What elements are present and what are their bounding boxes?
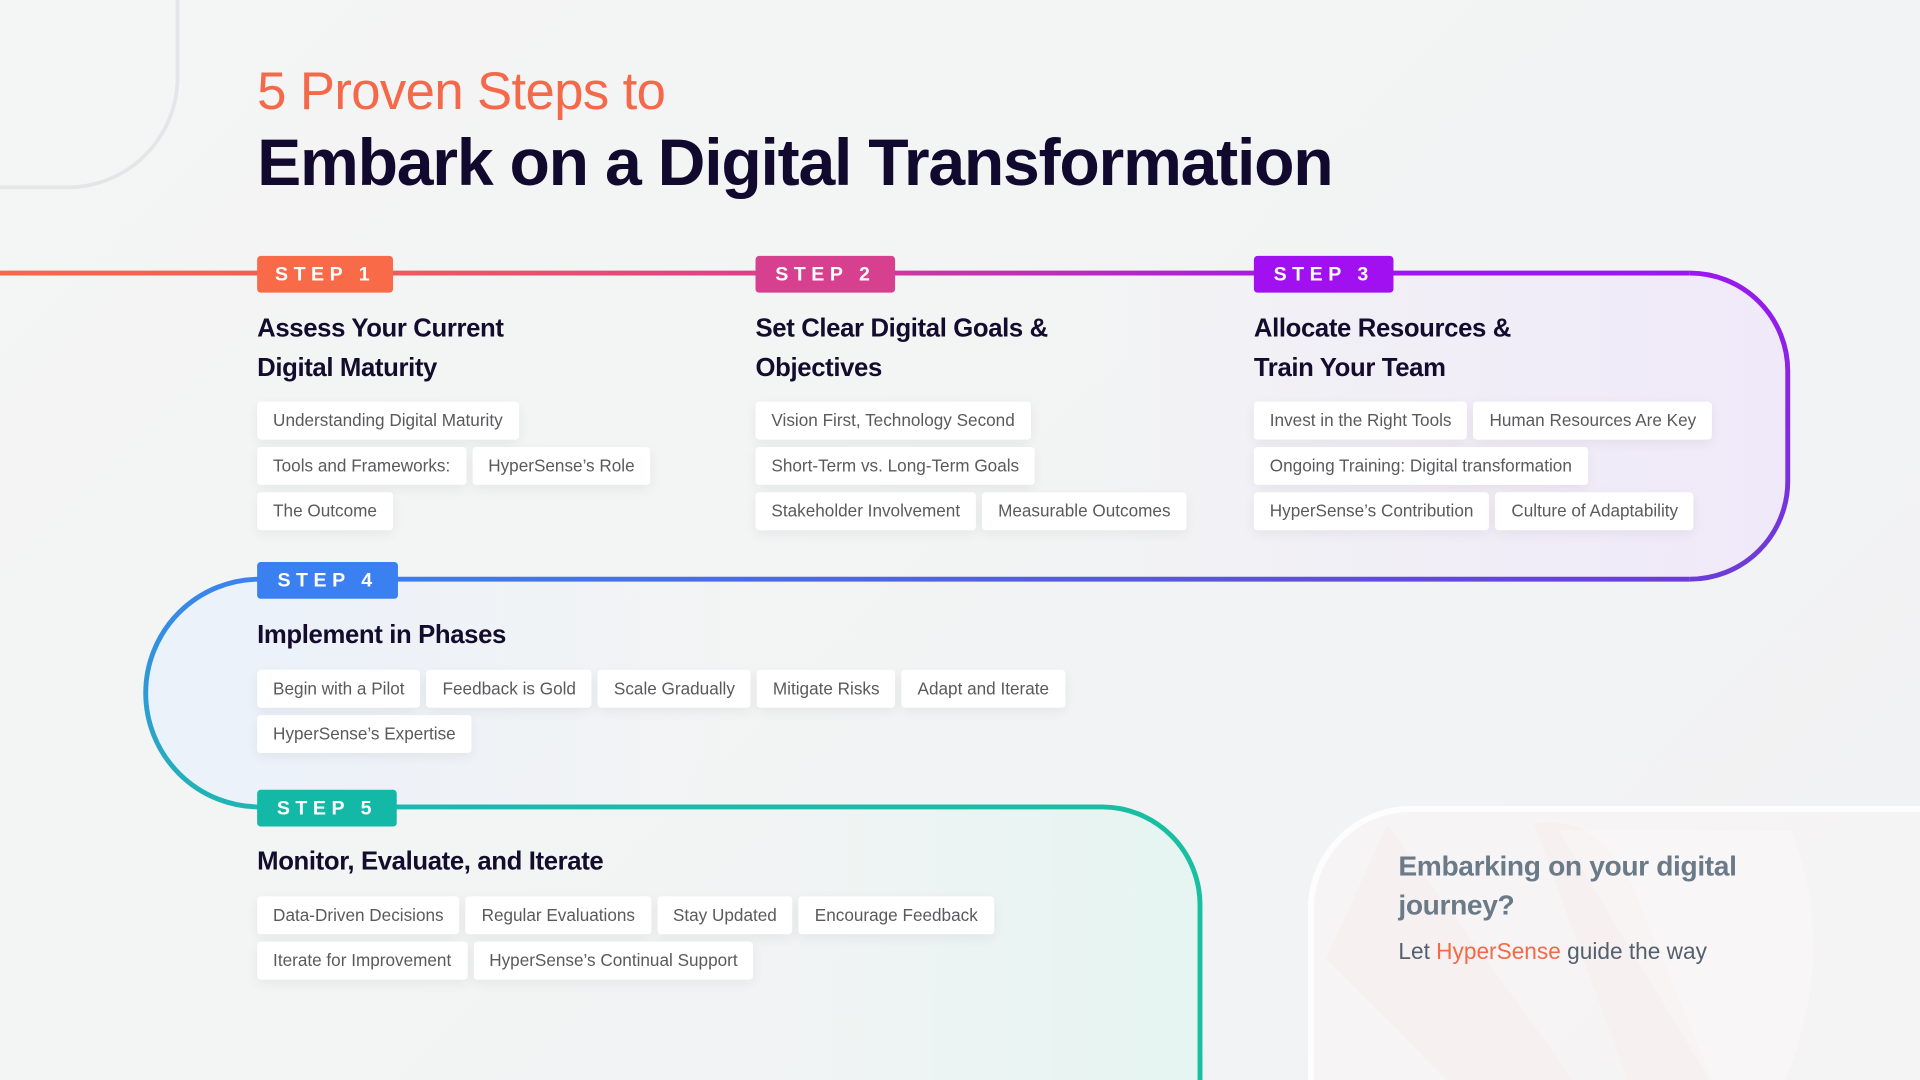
step 2: STEP 2 — [775, 264, 875, 285]
step 5 — [257, 790, 994, 982]
title: Embark on a Digital Transformation — [257, 126, 1332, 200]
step 5: STEP 5 — [277, 798, 377, 819]
step 3: Allocate Resources & — [1254, 315, 1511, 343]
step 2: Stakeholder Involvement — [771, 501, 960, 520]
step 4: Feedback is Gold — [443, 678, 576, 698]
step 1: Tools and Frameworks: — [273, 456, 450, 475]
step 4: Scale Gradually — [614, 678, 735, 698]
step 5: Data-Driven Decisions — [273, 905, 444, 924]
step 1: Understanding Digital Maturity — [273, 410, 503, 430]
step 1 — [257, 256, 650, 532]
step 1: HyperSense’s Role — [488, 456, 635, 475]
step 3: Human Resources Are Key — [1489, 410, 1696, 430]
step 1: Assess Your Current — [257, 315, 504, 343]
decorative logo shape — [1314, 812, 1920, 1080]
callout text: Embarking on your digital journey? — [1398, 850, 1737, 921]
callout card — [1308, 806, 1920, 1080]
title — [257, 62, 1332, 200]
step 2: Measurable Outcomes — [998, 501, 1171, 520]
step 3: Train Your Team — [1254, 354, 1446, 382]
step 3: STEP 3 — [1274, 264, 1374, 285]
step 1: The Outcome — [273, 501, 377, 520]
step 3: Ongoing Training: Digital transformation — [1270, 456, 1572, 475]
step 2: Objectives — [756, 354, 882, 382]
title: 5 Proven Steps to — [257, 62, 665, 121]
step 2: Short-Term vs. Long-Term Goals — [771, 456, 1019, 475]
step 1: STEP 1 — [275, 264, 375, 285]
callout text: Let HyperSense guide the way — [1398, 938, 1707, 964]
step 5: HyperSense’s Continual Support — [489, 950, 738, 970]
step 4: Implement in Phases — [257, 621, 506, 649]
step 5: Stay Updated — [673, 905, 777, 924]
step 4: Adapt and Iterate — [918, 678, 1049, 698]
step 2: Set Clear Digital Goals & — [756, 315, 1048, 343]
callout text — [1398, 850, 1737, 964]
decorative corner arc — [0, 0, 178, 187]
step 5: Regular Evaluations — [482, 905, 635, 924]
step 4: HyperSense’s Expertise — [273, 724, 456, 743]
step 5: Iterate for Improvement — [273, 950, 451, 970]
step 1: Digital Maturity — [257, 354, 437, 382]
step 3: Culture of Adaptability — [1511, 501, 1678, 520]
step 3 — [1254, 256, 1712, 532]
step 2 — [755, 256, 1186, 532]
path: step connector — [0, 273, 1788, 1080]
step 5: Encourage Feedback — [815, 905, 978, 924]
step 4 — [257, 562, 1065, 755]
step 3: Invest in the Right Tools — [1270, 410, 1451, 430]
step 3: HyperSense’s Contribution — [1270, 501, 1473, 520]
step 4: Begin with a Pilot — [273, 678, 405, 698]
step 4: STEP 4 — [277, 571, 378, 591]
step 5: Monitor, Evaluate, and Iterate — [257, 847, 603, 876]
step 2: Vision First, Technology Second — [771, 410, 1015, 430]
step 4: Mitigate Risks — [773, 678, 880, 698]
